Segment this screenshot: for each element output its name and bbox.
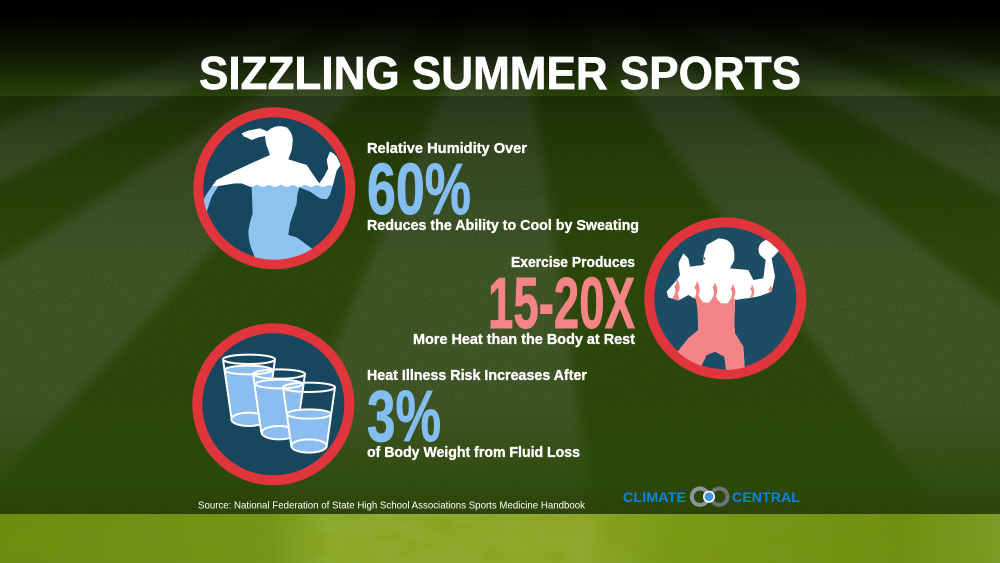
logo: Climate Central: CENTRAL [732,489,800,505]
stat: 60%: 60% [367,150,471,230]
source note: Source: National Federation of State High School Associations Sports Medicine Handbook [198,500,586,512]
icon: three glasses of water [197,328,349,480]
glass 3 [283,383,335,453]
logo: Climate Central [623,488,800,505]
text block: humidity [367,141,639,234]
text block: humidity: Reduces the Ability to Cool by Sweating [367,218,639,234]
title: SIZZLING SUMMER SPORTS [199,47,801,99]
glass 1 [223,355,275,426]
icon: runner cooling with water [198,112,350,264]
text block: fluid loss [367,368,587,461]
icon: football player with flames [649,222,801,377]
text block: humidity: Relative Humidity Over [367,141,527,157]
stat: 3%: 3% [367,377,441,457]
stat: 15-20X: 15-20X [488,264,635,344]
text block: fluid loss: of Body Weight from Fluid Loss [367,445,580,461]
logo: Climate Central: CLIMATE [623,489,686,505]
bottom bright strip [0,514,1000,563]
dark overlay band [0,96,1000,514]
text block: exercise heat [413,255,635,348]
glass 2 [253,369,305,439]
text block: exercise heat: Exercise Produces [511,255,635,271]
text block: fluid loss: Heat Illness Risk Increases After [367,368,587,384]
text block: exercise heat: More Heat than the Body at Rest [413,332,635,348]
